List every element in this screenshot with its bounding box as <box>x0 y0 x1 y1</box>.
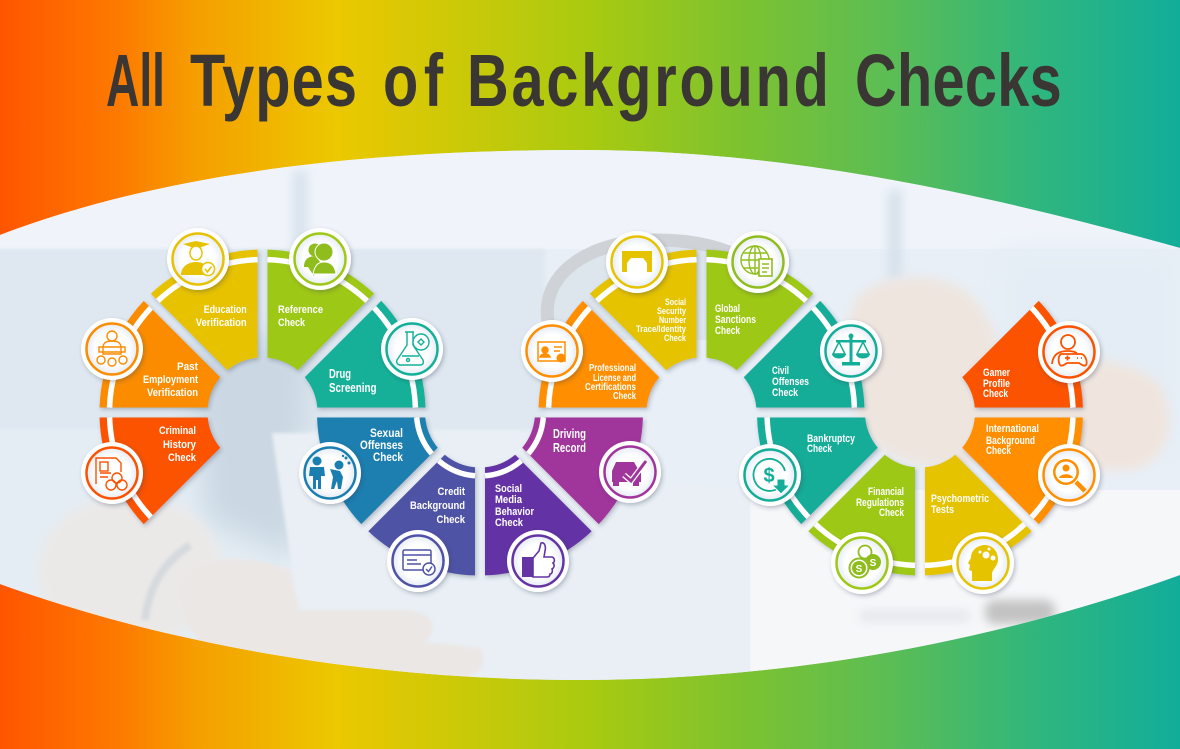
panel: driving record: Driving <box>553 426 586 441</box>
panel: professional license and certifications check: Check <box>613 391 636 402</box>
panel: credit background check: Check <box>436 514 466 526</box>
panel: psychometric tests: Tests <box>931 504 954 516</box>
blurred office photo inside lens shape <box>0 140 1180 690</box>
title: All <box>106 40 165 123</box>
title: Background <box>467 40 829 123</box>
icon: past employment <box>81 318 143 380</box>
panel: gamer profile check: Gamer <box>983 367 1011 379</box>
panel: gamer profile check: Check <box>983 388 1009 400</box>
icon: two people reference <box>289 228 351 290</box>
icon: credit card <box>387 530 449 592</box>
panel: education verification: Education <box>204 304 247 316</box>
panel: reference check: Check <box>278 317 306 329</box>
title: Checks <box>855 40 1062 123</box>
panel: civil offenses check <box>735 301 896 462</box>
icon: coins: S <box>856 564 863 575</box>
panel: sexual offenses check: Offenses <box>360 438 403 452</box>
panel: civil offenses check: Check <box>772 387 799 399</box>
panel: past employment verification: Verification <box>147 387 198 399</box>
icon: magnifier with person <box>1038 444 1100 506</box>
panel: credit background check: Background <box>410 500 465 512</box>
icon: gamer profile <box>1038 321 1100 383</box>
panel: social security number trace / identity check: Check <box>664 333 687 344</box>
panel: drug screening: Drug <box>329 366 351 381</box>
panel: financial regulations check <box>808 455 915 575</box>
panel: professional license and certifications check: Professional <box>589 363 636 374</box>
panel: civil offenses check: Civil <box>772 365 789 377</box>
panel: social media behavior check <box>431 446 592 607</box>
panel: bankruptcy check: Check <box>807 443 833 455</box>
panel: global sanctions check: Check <box>715 325 741 337</box>
panel: social media behavior check: Behavior <box>495 506 535 518</box>
segmented S-shaped ribbon of check types <box>68 218 1114 607</box>
panel: financial regulations check: Financial <box>868 486 904 498</box>
panel: sexual offenses check: Check <box>373 450 403 464</box>
icon: head with brain nodes <box>952 532 1014 594</box>
panel: social security number trace / identity check <box>590 218 751 379</box>
icon: dollar with down arrow: $ <box>763 465 775 487</box>
title: of <box>383 40 444 123</box>
icon: graduate <box>167 228 229 290</box>
icon: scales <box>820 320 882 382</box>
panel: social security number trace / identity check: Social <box>665 297 686 308</box>
title <box>106 40 1062 123</box>
panel: reference check <box>268 250 374 370</box>
icon: two figures <box>299 442 361 504</box>
panel: civil offenses check: Offenses <box>772 376 809 388</box>
panel: past employment verification: Employment <box>143 374 198 386</box>
panel: credit background check <box>368 455 475 575</box>
panel: financial regulations check: Check <box>879 507 905 519</box>
panel: drug screening <box>296 301 457 462</box>
panel: driving record <box>522 418 643 524</box>
panel: professional license and certifications check: License and <box>593 373 636 384</box>
panel: global sanctions check: Sanctions <box>715 314 756 326</box>
panel: global sanctions check <box>706 250 813 370</box>
panel: education verification <box>151 218 312 379</box>
icon: license certificate <box>521 320 583 382</box>
panel: gamer profile check: Profile <box>983 378 1010 390</box>
panel: gamer profile check <box>953 301 1114 462</box>
panel: international background check: Background <box>986 435 1035 447</box>
panel: criminal history check: Check <box>168 452 197 464</box>
icon: car with check <box>599 441 661 503</box>
panel: past employment verification: Past <box>177 361 198 373</box>
icon badges <box>81 228 1100 594</box>
panel: international background check: Check <box>986 445 1012 457</box>
panel: social security number trace / identity check: Number <box>659 315 686 326</box>
panel: criminal history check: Criminal <box>159 425 196 437</box>
panel: bankruptcy check <box>726 363 887 524</box>
panel: sexual offenses check <box>286 363 447 524</box>
panel: international background check <box>962 418 1083 524</box>
icon: coins <box>831 532 893 594</box>
icon: thumbs up <box>507 530 569 592</box>
panel: psychometric tests <box>871 446 1032 607</box>
panel: reference check: Reference <box>278 304 323 316</box>
panel: education verification: Verification <box>196 317 247 329</box>
panel: professional license and certifications check: Certifications <box>585 382 636 393</box>
panel: social media behavior check: Media <box>495 494 523 506</box>
panel: credit background check: Credit <box>438 486 465 498</box>
panel: sexual offenses check: Sexual <box>370 426 403 440</box>
panel: global sanctions check: Global <box>715 303 740 315</box>
panel: psychometric tests: Psychometric <box>931 493 989 505</box>
icon: flask <box>381 318 443 380</box>
panel: bankruptcy check: Bankruptcy <box>807 433 856 445</box>
panel: social media behavior check: Social <box>495 483 522 495</box>
icon: social security card <box>606 231 668 293</box>
panel: past employment verification <box>100 301 220 408</box>
icon: dollar with down arrow <box>739 444 801 506</box>
panel: criminal history check: History <box>163 439 197 451</box>
icon: criminal history <box>81 442 143 504</box>
icon: coins: S <box>870 558 877 569</box>
panel: criminal history check <box>68 363 229 524</box>
icon: globe with document <box>727 231 789 293</box>
panel: financial regulations check: Regulations <box>856 497 904 509</box>
panel: social security number trace / identity check: Trace/Identity <box>636 324 687 335</box>
panel: social security number trace / identity check: Security <box>657 306 687 317</box>
panel: professional license and certifications check <box>539 301 659 408</box>
panel: international background check: International <box>986 423 1039 435</box>
panel: social media behavior check: Check <box>495 517 524 529</box>
panel: drug screening: Screening <box>329 380 377 395</box>
panel: driving record: Record <box>553 440 586 455</box>
title: Types <box>190 40 357 123</box>
